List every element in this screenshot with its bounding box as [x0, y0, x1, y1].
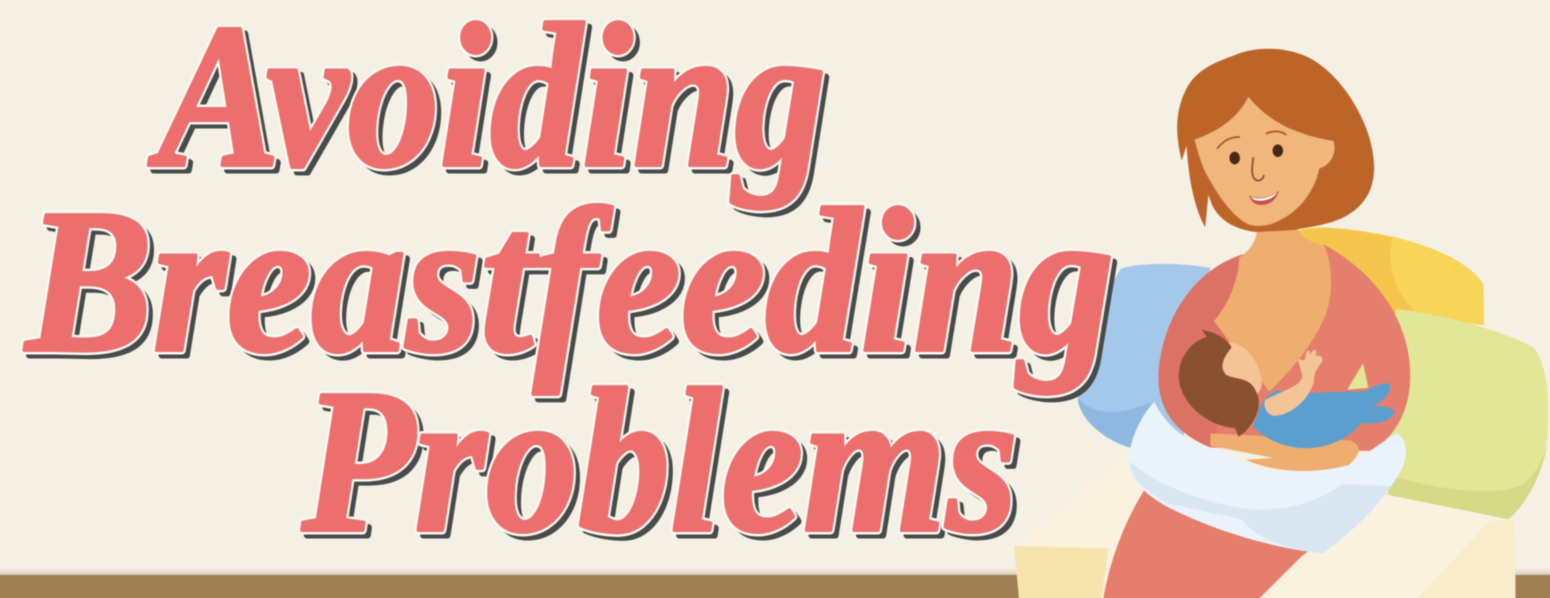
face	[1195, 97, 1335, 226]
eyes	[1229, 144, 1283, 164]
green gap under the arm	[1347, 363, 1368, 390]
illustration: mother breastfeeding on a chair with pillows	[1014, 49, 1548, 598]
title: Avoiding Breastfeeding Problems	[24, 0, 1119, 580]
hair	[1177, 49, 1374, 232]
coral fill layer	[24, 0, 1114, 575]
dark shadow layer	[29, 0, 1119, 580]
skirt	[1100, 490, 1316, 598]
sweater	[1158, 245, 1410, 451]
baby hair	[1179, 330, 1259, 437]
floor band	[0, 566, 1550, 598]
yellow pillow	[1298, 228, 1484, 325]
mouth	[1249, 191, 1279, 205]
nose	[1252, 158, 1264, 181]
onesie	[1253, 383, 1395, 448]
eyebrows	[1217, 131, 1286, 148]
mother's lower arm	[1210, 433, 1359, 471]
neck and chest	[1214, 219, 1331, 391]
nursing pillow	[1128, 402, 1406, 553]
chair	[1014, 447, 1516, 598]
baby face	[1219, 342, 1262, 395]
white outline layer	[24, 0, 1114, 575]
baby	[1179, 330, 1395, 448]
green pillow	[1386, 309, 1548, 519]
baby arm	[1264, 350, 1322, 416]
blue pillow	[1078, 264, 1210, 447]
